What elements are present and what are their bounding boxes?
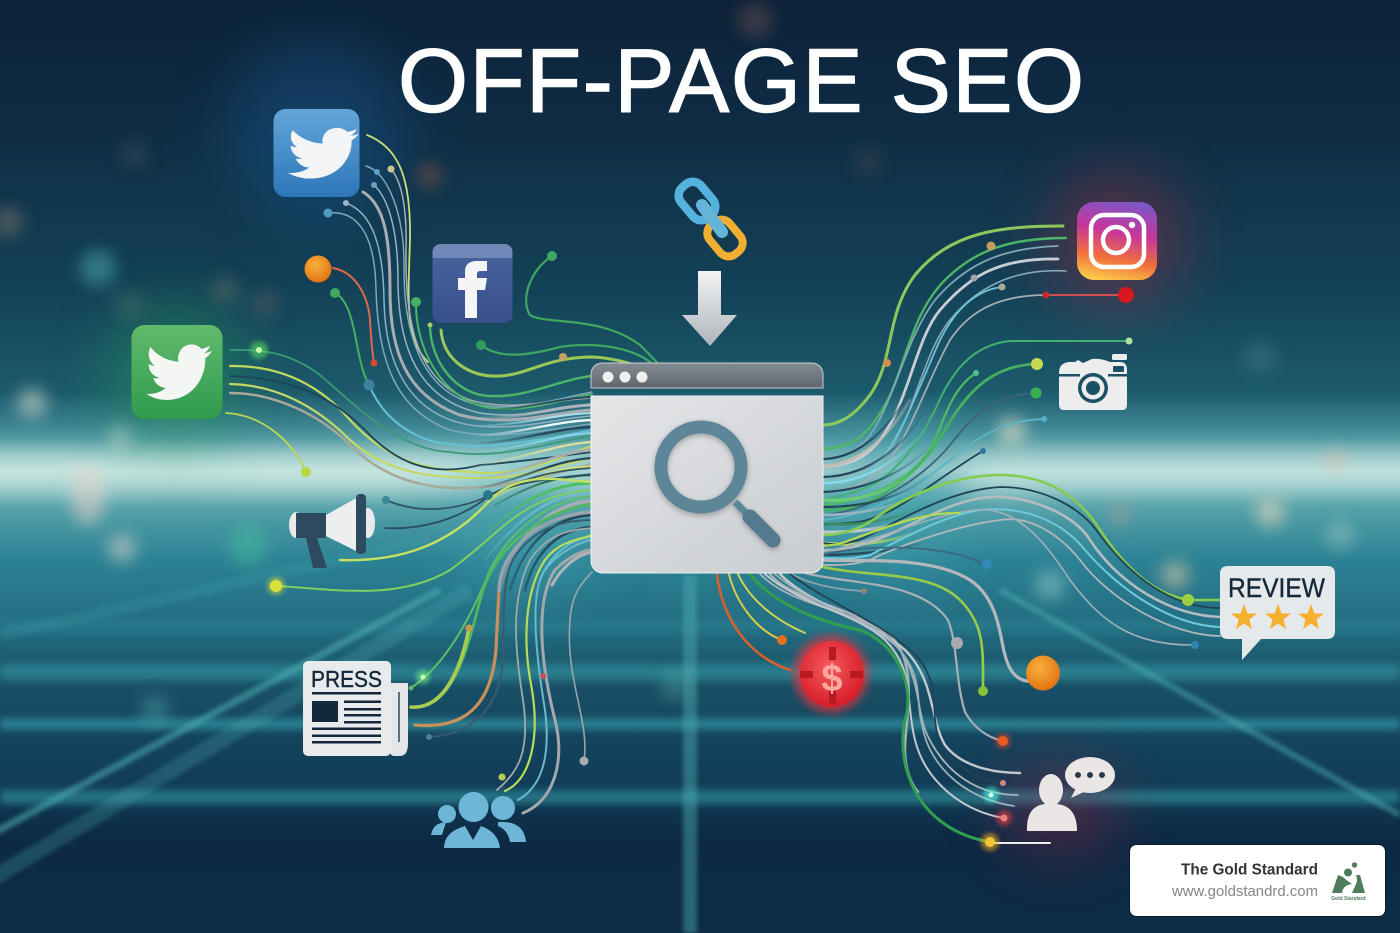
dense left bundle near window edge [470, 397, 592, 590]
icon: green twitter bird [132, 325, 222, 419]
icon: person with chat bubble [1027, 757, 1115, 831]
dollar sign: $ [821, 658, 843, 700]
icon: instagram [1077, 202, 1157, 280]
icon: orange sphere [1026, 656, 1060, 690]
icon: review bubble with stars [1220, 566, 1335, 660]
stars [1231, 604, 1324, 629]
icon: people group [431, 792, 526, 848]
icon: magnifying glass [661, 427, 773, 540]
icon: facebook [432, 244, 512, 323]
strands: right side flowing out of the browser window [717, 226, 1220, 843]
icon: red dollar coin [793, 635, 869, 713]
icon: press newspaper [303, 661, 408, 756]
brand logo: Gold Standard [1331, 896, 1366, 902]
icon: blue twitter bird [274, 109, 360, 197]
icon: megaphone [289, 494, 375, 568]
review label: REVIEW [1228, 573, 1325, 603]
window title bar [591, 363, 823, 388]
brand url: www.goldstandrd.com [1171, 884, 1318, 900]
window body [591, 396, 823, 573]
icon: camera [1059, 354, 1127, 410]
icon: link chain [674, 177, 747, 261]
title: OFF-PAGE SEO [398, 32, 1084, 132]
icon: orange ball [304, 256, 332, 282]
attribution card [1130, 844, 1386, 916]
strands: left side flowing into the browser window [226, 135, 665, 813]
strand end dots and glowing nodes [250, 166, 1199, 851]
panel: browser window with search icon [591, 363, 823, 573]
dense right bundle near window edge [823, 400, 935, 555]
arrow: down into window [682, 271, 737, 346]
brand name: The Gold Standard [1181, 862, 1318, 878]
brand logo [1331, 862, 1366, 902]
press label: PRESS [311, 666, 382, 692]
